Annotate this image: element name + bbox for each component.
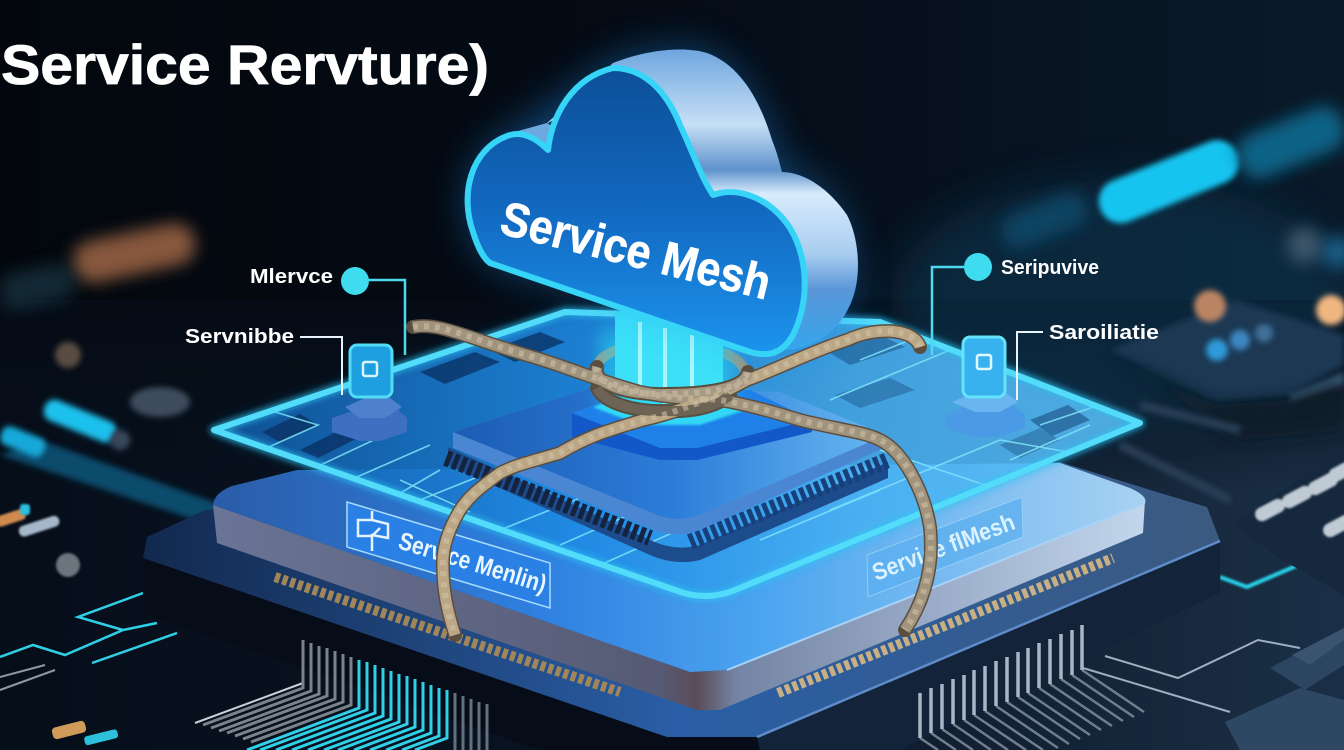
bottom left pin rows [203, 640, 487, 750]
glass circuit plate [214, 312, 1140, 596]
callout: Seripuvive: Seripuvive [1001, 257, 1099, 279]
cloud 3D side [507, 50, 858, 350]
gold pin strips [275, 558, 1113, 693]
callout: Saroiliatie: Saroiliatie [1049, 322, 1159, 344]
title: Service Rervture) [1, 33, 489, 96]
callout: Servnibbe [185, 326, 342, 395]
service mesh label left: Service Menlin) [395, 527, 550, 598]
plate cells [262, 320, 1120, 565]
central chip [446, 385, 888, 562]
glowing cloud stem [600, 310, 735, 405]
callout: Seripuvive [932, 253, 1099, 355]
rope back ring [597, 348, 745, 370]
central block under stem [572, 390, 812, 460]
callout: Mlervce [250, 266, 405, 355]
callout: Mlervce: Mlervce [250, 266, 333, 288]
left background components [0, 342, 250, 577]
base board [143, 462, 1220, 750]
rope [413, 326, 931, 635]
right background chip [1110, 290, 1344, 440]
right circuit traces and keys [1083, 405, 1344, 750]
icon: service glyph [358, 511, 388, 551]
cloud glow [469, 50, 853, 350]
blurred background lights [0, 100, 1344, 312]
cloud front [468, 68, 805, 354]
service mesh label right: Service flMesh [869, 509, 1019, 587]
callout: Servnibbe: Servnibbe [185, 326, 294, 348]
right node icon [945, 337, 1025, 437]
bottom right pin rows [920, 625, 1144, 750]
callout: Saroiliatie [1017, 322, 1159, 400]
service mesh label left [347, 502, 550, 608]
main platform [213, 463, 1145, 710]
left node icon [332, 345, 407, 441]
cloud label: Service Mesh [495, 192, 776, 310]
left circuit traces [0, 593, 303, 746]
